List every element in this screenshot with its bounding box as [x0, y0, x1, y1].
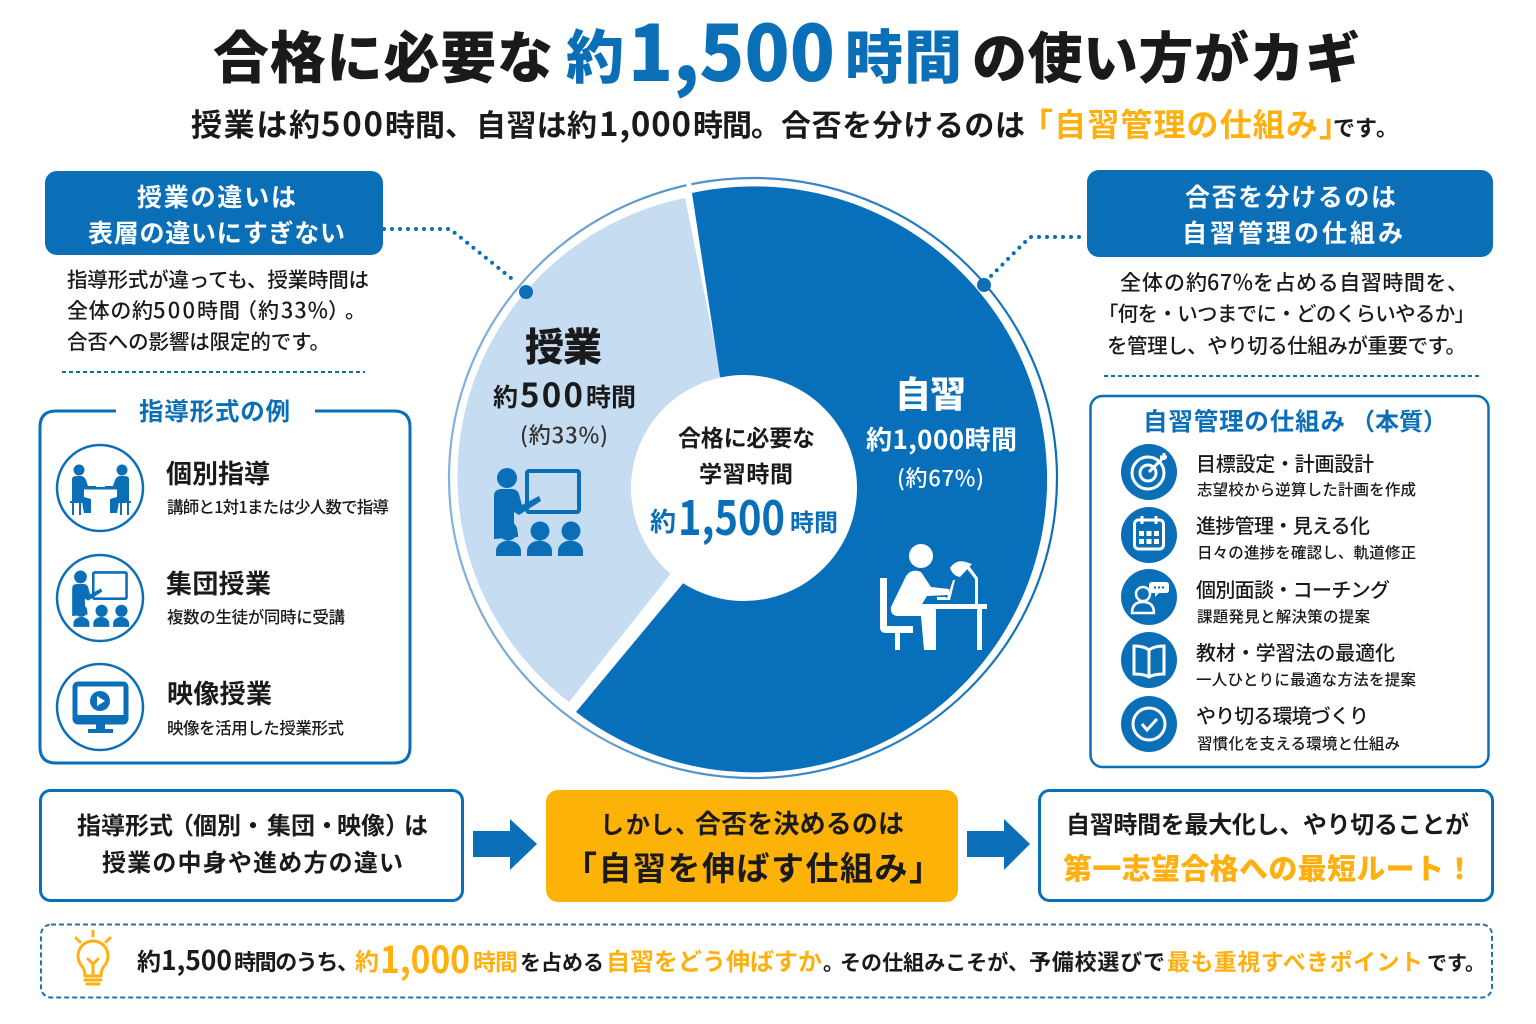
text block: left description: 約: [258, 295, 279, 325]
text block: left description: ）: [328, 295, 349, 325]
conclusion banner: 約: [355, 942, 379, 977]
item: やり切る環境: [1121, 696, 1400, 754]
item: 教材: 一人ひとりに最適な方法を提案: [1196, 668, 1416, 690]
text block: left description: [67, 263, 369, 355]
chart outer ring: [449, 178, 1057, 778]
item: 映像授業: 映像を活用した授業形式: [167, 715, 344, 739]
item: やり切る環境: 習慣化を支える環境と仕組み: [1197, 732, 1400, 754]
item: 教材: [1121, 632, 1416, 690]
subtitle: 1,000: [599, 98, 691, 146]
segment: 授業 33%: [457, 198, 726, 702]
subtitle: 合否を分けるのは: [781, 101, 1025, 145]
item: 個別面談: 課題発見と解決策の提案: [1197, 605, 1370, 627]
text block: right description: を管理し、やり切る仕組みが重要です。: [1107, 329, 1466, 359]
text block: left description: 時間: [197, 295, 240, 325]
box: 最短ルート: 自習時間を最大化し、やり切ることが: [1066, 805, 1469, 840]
item: 集団授業: [57, 555, 345, 641]
callout: left heading: [45, 171, 383, 255]
title: 合格に必要な: [213, 14, 553, 95]
conclusion banner: その仕組みこそが、: [840, 947, 1029, 977]
item: 個別面談: 個別面談・コーチング: [1196, 574, 1390, 603]
text block: right description: 67%: [1207, 266, 1253, 297]
center circle: 時間: [790, 503, 838, 538]
center circle: [631, 375, 857, 601]
panel: 指導形式の例: [40, 393, 410, 763]
item: 進捗管理: 日々の進捗を確認し、軌道修正: [1197, 541, 1416, 563]
box: 自習を伸ばす仕組み: [546, 790, 958, 902]
center circle: 合格に必要な: [678, 419, 815, 453]
conclusion banner: です。: [1427, 947, 1485, 976]
subtitle: 授業は約: [191, 100, 320, 145]
box: 最短ルート: 第一志望合格への最短ルート: [1063, 846, 1444, 888]
icon: light bulb: [76, 931, 110, 984]
text block: left description: 全体の約: [67, 295, 153, 325]
box: 自習を伸ばす仕組み: 「自習を伸ばす仕組み」: [564, 842, 942, 890]
panel heading: 指導形式の例: [139, 393, 290, 428]
panel heading: （本質）: [1351, 402, 1447, 437]
text block: right description: を占める自習時間を、: [1253, 267, 1468, 297]
title: の使い方がカギ: [972, 14, 1360, 94]
arrow: right: [967, 819, 1030, 870]
text block: right description: [1098, 266, 1475, 359]
item: 目標設定: 志望校から逆算した計画を作成: [1197, 478, 1416, 500]
text block: right description: 全体の約: [1120, 267, 1207, 297]
callout: right heading: 合否を分けるのは: [1185, 178, 1396, 214]
panel heading: 自習管理の仕組み: [1143, 403, 1345, 438]
label: 自習: 約1,000時間: [866, 420, 1017, 457]
item: 集団授業: 集団授業: [166, 564, 271, 601]
callout: right heading: [1087, 170, 1493, 257]
conclusion banner: 約: [137, 942, 161, 977]
item: 教材: 教材・学習法の最適化: [1196, 637, 1395, 666]
panel: 自習管理の仕組み: [1090, 396, 1488, 767]
label: 授業: [493, 317, 636, 450]
item: 集団授業: 複数の生徒が同時に受講: [167, 604, 345, 628]
subtitle: 自習は約: [476, 101, 597, 145]
conclusion banner: 1,500: [161, 939, 232, 978]
subtitle: 500: [321, 98, 383, 146]
connector: left dotted leader: [384, 229, 533, 299]
segment: 自習 67%: [576, 186, 1047, 772]
label: 授業: 約: [493, 378, 518, 414]
item: 個別指導: 個別指導: [166, 454, 270, 491]
label: 自習: (約67%): [897, 461, 984, 493]
callout: left heading: 表層の違いにすぎない: [88, 214, 345, 250]
conclusion banner: 自習をどう伸ばすか: [606, 942, 822, 977]
label: 授業: 500: [520, 369, 583, 417]
connector: right dotted leader: [977, 237, 1079, 292]
item: 映像授業: 映像授業: [167, 674, 272, 711]
subtitle: [191, 98, 1398, 146]
text block: right description: 「何を・いつまでに・どのくらいやるか」: [1098, 297, 1475, 327]
label: 授業: 時間: [586, 378, 636, 414]
panel heading: [1143, 402, 1447, 438]
box: 自習を伸ばす仕組み: しかし、: [600, 805, 699, 840]
item: 進捗管理: [1121, 507, 1416, 563]
item: 映像授業: [57, 664, 344, 750]
box: 最短ルート: ！: [1445, 846, 1474, 888]
text block: left description: 33%: [281, 294, 328, 325]
title: 時間: [845, 11, 962, 95]
conclusion banner: [41, 924, 1492, 998]
item: 個別指導: [57, 445, 389, 531]
conclusion banner: 時間のうち、: [234, 945, 359, 977]
icon: classroom: [494, 468, 583, 556]
conclusion banner: 1,000: [380, 930, 470, 984]
box: 指導形式の違い: 指導形式（個別・集団・映像）は: [77, 806, 428, 841]
text block: left description: 合否への影響は限定的です。: [67, 325, 330, 355]
conclusion banner: を占める: [520, 947, 604, 977]
item: やり切る環境: やり切る環境づくり: [1196, 700, 1369, 729]
item: 個別指導: 講師と1対1または少人数で指導: [167, 494, 389, 518]
callout: left heading: 授業の違いは: [137, 178, 296, 214]
box: 最短ルート: [1040, 790, 1492, 900]
label: 授業: (約33%): [520, 418, 608, 450]
center circle: 学習時間: [699, 455, 793, 489]
conclusion banner: 。: [823, 947, 844, 977]
subtitle: 時間、: [385, 101, 475, 145]
conclusion banner: 最も重視すべきポイント: [1167, 943, 1423, 977]
title: [213, 0, 1360, 104]
label: 授業: 授業: [525, 317, 602, 373]
arrow: left: [473, 819, 537, 870]
subtitle: です。: [1333, 111, 1398, 143]
subtitle: 時間。: [693, 101, 781, 145]
item: 目標設定: [1121, 444, 1416, 500]
donut chart: [449, 176, 1057, 778]
icon: student at desk: [880, 544, 987, 650]
conclusion banner: 予備校選びで: [1029, 945, 1165, 977]
subtitle: 「自習管理の仕組み」: [1021, 100, 1351, 146]
text block: left description: （: [236, 295, 257, 325]
text block: left description: 500: [153, 293, 195, 325]
text block: left description: 指導形式が違っても、授業時間は: [67, 263, 369, 293]
callout: right heading: 自習管理の仕組み: [1182, 214, 1403, 250]
box: 指導形式の違い: [40, 790, 462, 900]
box: 指導形式の違い: 授業の中身や進め方の違い: [102, 843, 403, 878]
text block: left description: 。: [345, 295, 366, 325]
item: 個別面談: [1121, 569, 1390, 627]
center circle: 約: [650, 502, 676, 539]
label: 自習: 自習: [895, 366, 966, 418]
item: 目標設定: 目標設定・計画設計: [1196, 448, 1374, 477]
item: 進捗管理: 進捗管理・見える化: [1196, 510, 1370, 539]
label: 自習: [866, 366, 1017, 493]
conclusion banner: 時間: [473, 943, 518, 977]
center circle: 1,500: [678, 480, 785, 549]
title: 約: [566, 11, 624, 95]
box: 自習を伸ばす仕組み: 合否を決めるのは: [695, 804, 904, 841]
